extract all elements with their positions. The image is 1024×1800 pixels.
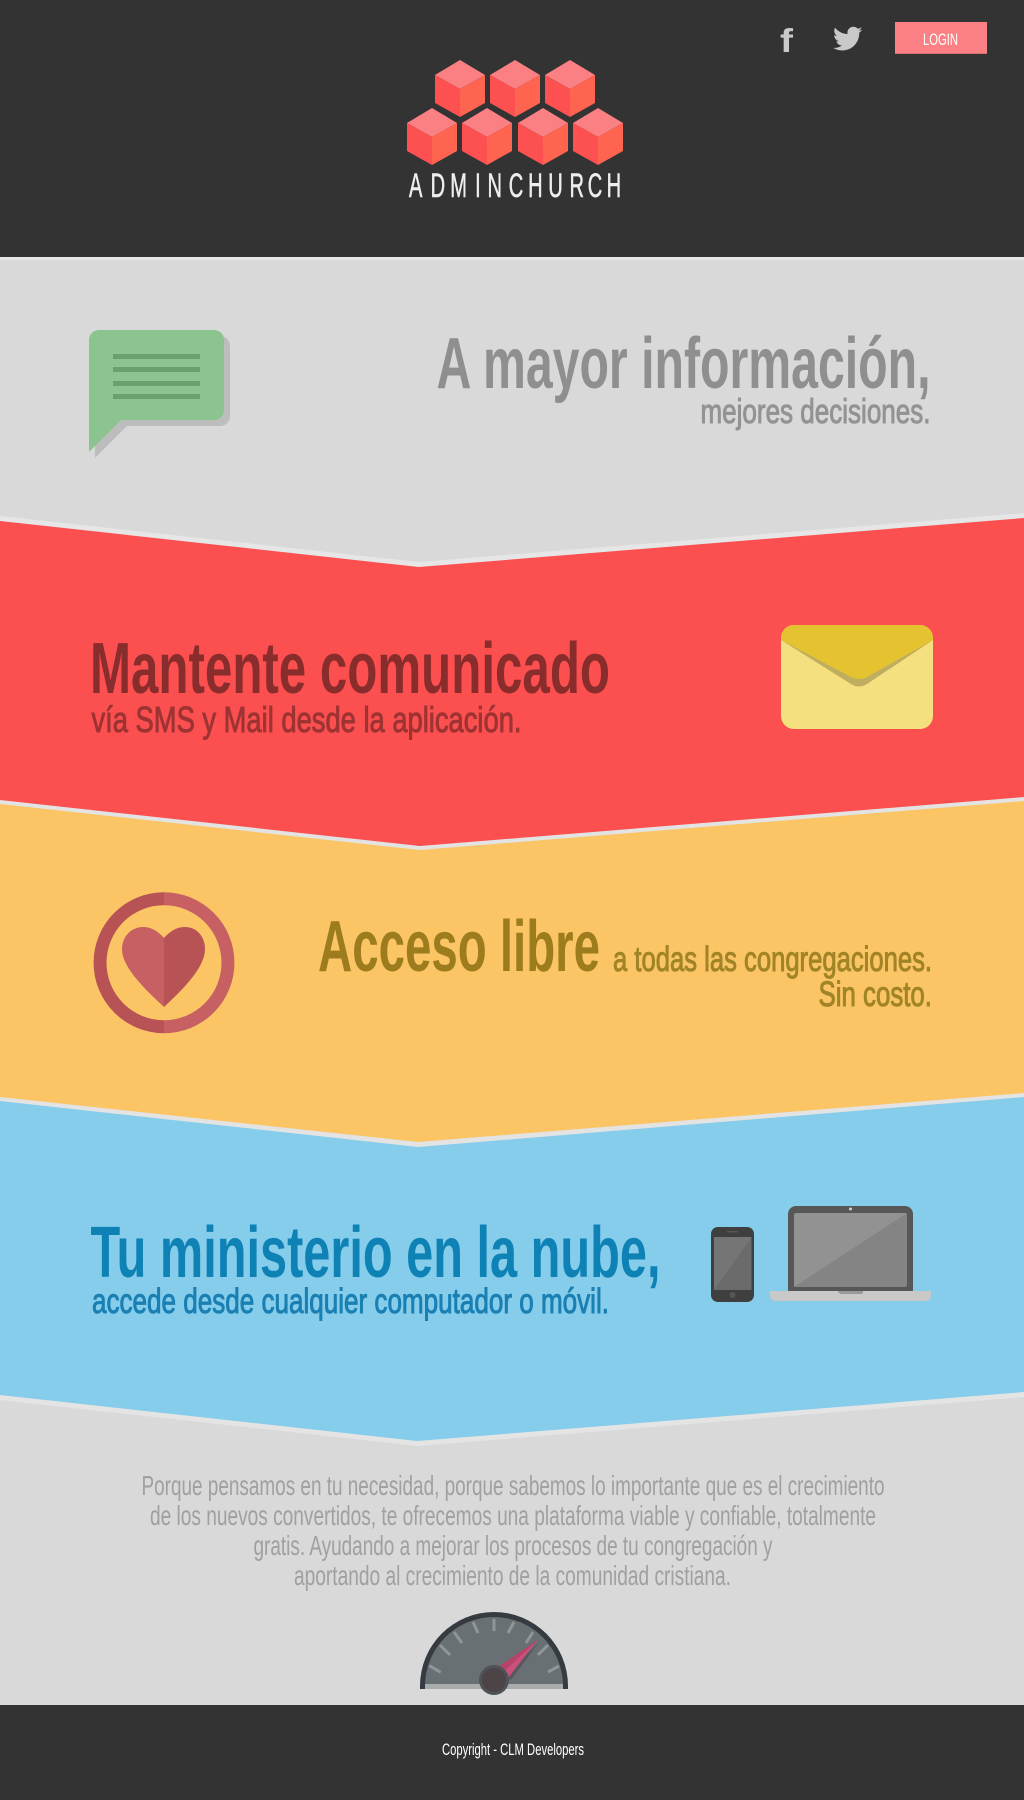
subheading: vía sms y mail: vía SMS y Mail desde la aplicación. [92, 699, 522, 740]
text block: descripción [142, 1470, 884, 1591]
heading: acceso libre: Acceso libre [318, 907, 600, 987]
divider band 3 [0, 1093, 1024, 1160]
icon: laptop [770, 1206, 931, 1301]
panel: footer [0, 1705, 1024, 1800]
logo: wordmark: ADMINCHURCH [409, 167, 621, 204]
copyright: Copyright - CLM Developers [442, 1741, 584, 1759]
icon: twitter [833, 27, 862, 50]
divider band 2 [0, 797, 1024, 865]
heading: tu ministerio: Tu ministerio en la nube, [90, 1213, 660, 1293]
divider band 1 [0, 513, 1024, 580]
divider band 4 [0, 1392, 1024, 1460]
icon: chat bubble [89, 330, 230, 458]
panel: ministerio en la nube [0, 1097, 1024, 1447]
subheading: mejores decisiones: mejores decisiones. [700, 393, 930, 431]
login button: LOGIN [923, 31, 958, 49]
subheading: accede desde: accede desde cualquier computador o móvil. [92, 1282, 609, 1321]
login button [895, 22, 987, 54]
panel: información [0, 260, 1024, 530]
icon: envelope [781, 625, 933, 729]
icon: phone [711, 1227, 754, 1302]
text block: descripción: gratis. Ayudando a mejorar los procesos de tu congregación y [254, 1530, 772, 1561]
panel: comunicación [0, 518, 1024, 851]
icon: gauge [420, 1612, 568, 1695]
logo: cubes [407, 60, 623, 165]
subheading: sin costo: Sin costo. [818, 975, 932, 1014]
text block: descripción: aportando al crecimiento de la comunidad cristiana. [294, 1560, 731, 1591]
panel: acceso libre [0, 801, 1024, 1148]
icon: heart in circle [94, 892, 234, 1033]
panel: descripción y medidor [0, 1397, 1024, 1705]
icon: facebook: f [780, 22, 794, 59]
panel: header [0, 0, 1024, 260]
heading: mantente comunicado: Mantente comunicado [90, 629, 610, 709]
